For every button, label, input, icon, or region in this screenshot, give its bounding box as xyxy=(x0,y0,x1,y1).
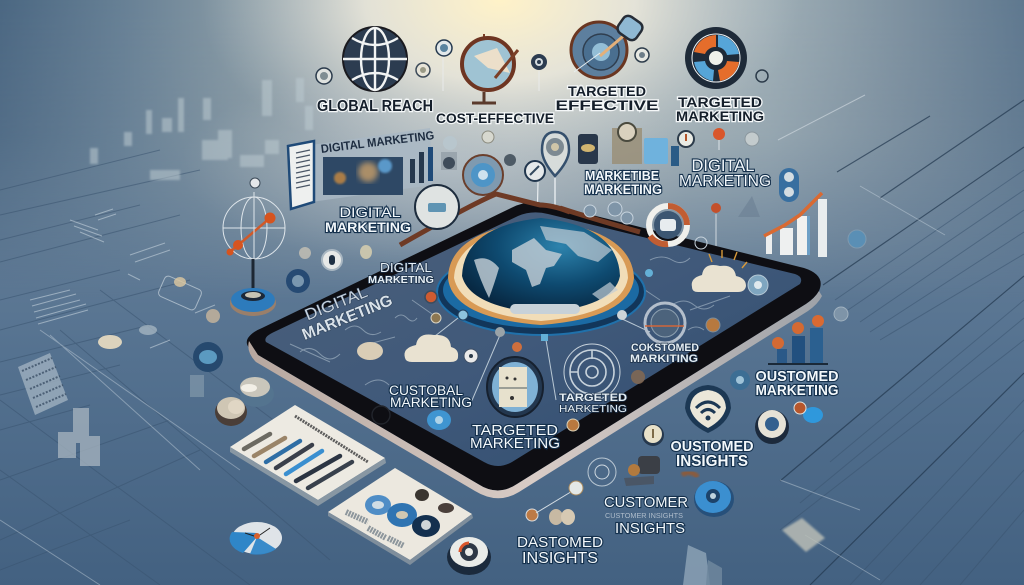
icons row under headings xyxy=(441,131,545,195)
icon: connected nodes and shells xyxy=(526,481,583,525)
dot icon top right floor xyxy=(848,230,866,248)
faint sketch patches left xyxy=(30,209,215,348)
pins into globe xyxy=(537,132,569,228)
heading: cost-effective: COST-EFFECTIVE xyxy=(436,111,554,126)
icon: targeted marketing donut xyxy=(685,27,747,89)
heading: customed marketing right: OUSTOMED xyxy=(756,368,839,385)
heading: marketing overlay xyxy=(584,168,662,197)
building bottom xyxy=(683,545,722,585)
icon: cloud right xyxy=(692,250,768,295)
heading: marketing overlay: MARKETING xyxy=(584,182,662,197)
pie chart xyxy=(230,522,282,555)
small markers top of tablet xyxy=(584,202,707,249)
tablet device xyxy=(247,202,822,498)
brochure: digital marketing: DIGITAL MARKETING xyxy=(320,128,435,156)
stone bowls left xyxy=(190,342,274,426)
icon: global reach globe xyxy=(343,27,407,91)
bar chart with orange tips right xyxy=(768,307,848,365)
connector nodes around globe xyxy=(430,269,653,405)
screen sketch notes xyxy=(290,257,730,385)
heading: digital marketing left: MARKETING xyxy=(325,219,411,235)
heading: digital marketing left xyxy=(325,204,411,235)
heading: customed marketing tablet: COKSTOMED xyxy=(631,342,699,354)
heading: customer insights xyxy=(604,494,688,537)
heading: targeted: TARGETED xyxy=(678,94,762,110)
heading: digital marketing slanted on tablet: MARKETING xyxy=(300,292,395,344)
product group top right xyxy=(578,123,679,166)
brochure: digital marketing xyxy=(288,128,435,209)
small top icons xyxy=(316,40,768,91)
heading: dastomed insights xyxy=(517,535,603,567)
wood plank floor lines xyxy=(780,100,1024,585)
marker icons right xyxy=(678,95,865,254)
figure icon xyxy=(588,456,660,486)
heading: custobal marketing xyxy=(389,383,472,410)
heading: targeted marketing center: MARKETING xyxy=(470,435,560,452)
heading: customed insights: INSIGHTS xyxy=(676,453,748,470)
heading: digital marketing slanted on tablet: DIGITAL xyxy=(303,284,370,324)
icon: cloud left xyxy=(357,334,478,363)
heading: digital marketing small on tablet xyxy=(368,261,434,286)
globe xyxy=(437,218,645,335)
heading: dastomed insights: DASTOMED xyxy=(517,535,603,551)
paper patch on floor xyxy=(782,518,825,552)
brown curve behind globe xyxy=(400,194,640,245)
icon: blue disk xyxy=(682,472,734,517)
badge next to digital heading xyxy=(286,185,459,293)
heading: customed marketing tablet xyxy=(630,342,699,365)
heading: customed insights: OUSTOMED xyxy=(670,438,754,455)
heading: targeted marketing small xyxy=(559,392,627,415)
heading: customed marketing right: MARKETING xyxy=(756,382,838,399)
heading: targeted marketing center xyxy=(470,422,560,452)
heading: customed insights xyxy=(670,438,754,470)
icon: radial target xyxy=(564,344,620,400)
heading: targeted marketing center: TARGETED xyxy=(472,422,558,439)
heading: customer insights: CUSTOMER INSIGHTS xyxy=(605,513,683,520)
icon: cost-effective magnifier xyxy=(462,34,518,103)
heading: global reach: GLOBAL REACH xyxy=(317,98,433,115)
icon: target with dart xyxy=(571,13,645,78)
floor icons left xyxy=(98,277,220,349)
icon: door frame capsule xyxy=(487,357,543,417)
heading: digital marketing left: DIGITAL xyxy=(340,204,401,220)
heading: digital marketing right xyxy=(679,157,771,190)
bar chart with arrow upper right xyxy=(764,193,827,257)
heading: customer insights: INSIGHTS xyxy=(615,521,685,537)
icon: customized magnifier xyxy=(645,303,685,343)
heading: digital marketing right: MARKETING xyxy=(679,173,771,190)
icon: target disk bottom xyxy=(447,537,491,575)
skyscraper cluster left xyxy=(18,353,100,466)
heading: targeted marketing small: HARKETING xyxy=(559,403,627,415)
globe-on-stand with orange nodes xyxy=(223,178,285,316)
heading: digital marketing small on tablet: DIGITAL xyxy=(380,261,432,275)
heading: digital marketing small on tablet: MARKETING xyxy=(368,274,434,286)
heading: dastomed insights: INSIGHTS xyxy=(522,550,598,567)
faint city skyline xyxy=(90,78,313,180)
heading: effective line: EFFECTIVE xyxy=(556,97,658,113)
heading: custobal marketing: MARKETING xyxy=(390,395,472,410)
heading: custobal marketing: CUSTOBAL xyxy=(389,383,463,398)
heading: digital marketing right: DIGITAL xyxy=(692,157,754,175)
report card: icons xyxy=(328,468,473,565)
report card: bar chart xyxy=(230,405,386,506)
heading: marketing overlay: MARKETIBE xyxy=(585,168,659,183)
icon: blue badge on tablet xyxy=(427,410,451,430)
heading: targeted effective: TARGETED xyxy=(568,83,646,99)
heading: targeted marketing small: TARGETED xyxy=(559,392,627,404)
icon: cloud-badge ring xyxy=(649,206,687,244)
heading: customer insights: CUSTOMER xyxy=(604,494,688,511)
heading: customed marketing tablet: MARKITING xyxy=(630,353,698,365)
heading: customed marketing right xyxy=(756,368,839,399)
icon: orange dots on tablet xyxy=(425,291,720,431)
small badges lower right xyxy=(642,370,823,446)
icon: wifi badge xyxy=(685,385,731,433)
heading: marketing: MARKETING xyxy=(676,108,764,124)
